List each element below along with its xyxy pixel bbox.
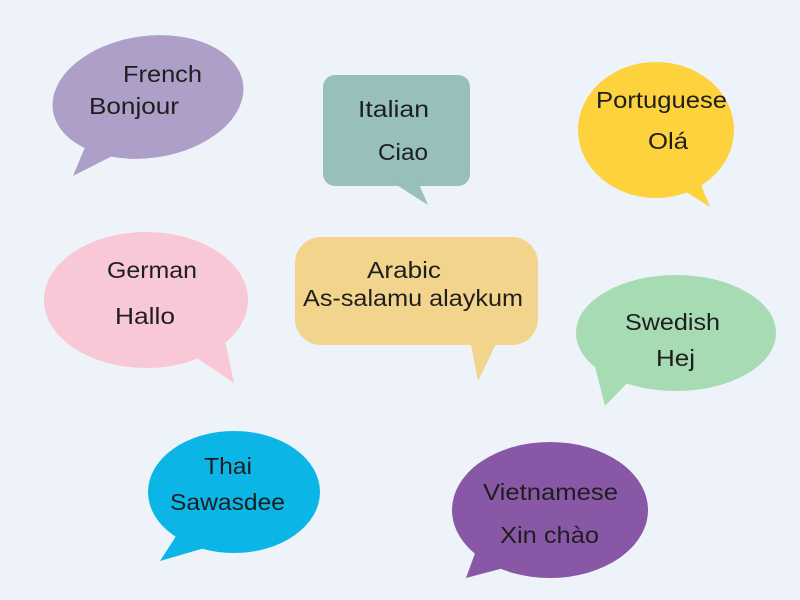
bubble: Swedish: [576, 275, 776, 406]
bubble: Portuguese: Olá: [648, 128, 688, 154]
bubble: German: Hallo: [115, 303, 175, 329]
bubble: Arabic: Arabic: [367, 257, 441, 283]
bubble: Vietnamese: Vietnamese: [483, 479, 618, 505]
bubble: Italian: Italian: [358, 96, 429, 122]
bubble: Arabic: As-salamu alaykum: [303, 285, 523, 311]
bubble: French: French: [123, 61, 202, 87]
bubble: Thai: Sawasdee: [170, 489, 285, 515]
bubble: Vietnamese: Xin chào: [500, 522, 599, 548]
bubble: French: Bonjour: [89, 93, 179, 119]
bubble: Portuguese: Portuguese: [596, 87, 727, 113]
bubble: Swedish: Swedish: [625, 309, 720, 335]
bubble: Portuguese: [578, 62, 734, 207]
bubble: German: German: [107, 257, 197, 283]
bubble: Thai: Thai: [204, 453, 252, 479]
bubble: German: [44, 232, 248, 383]
bubble: Swedish: Hej: [656, 345, 695, 371]
bubble: Italian: [323, 75, 470, 205]
bubble: Italian: Ciao: [378, 139, 428, 165]
bubble: Vietnamese: [452, 442, 648, 578]
bubble: Arabic: [295, 237, 538, 381]
bubble: French: [44, 23, 252, 176]
bubble: Thai: [148, 431, 320, 561]
